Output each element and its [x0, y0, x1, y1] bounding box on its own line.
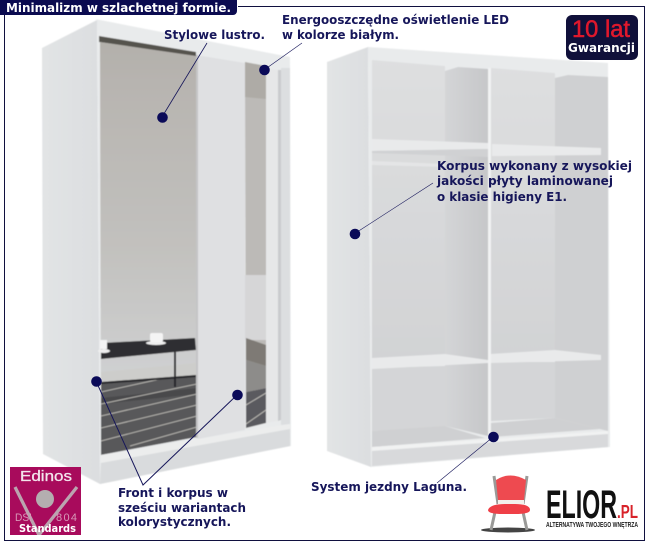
open wardrobe side panel — [327, 47, 371, 467]
lower shelves — [372, 350, 601, 369]
callout lines — [96, 43, 493, 485]
dark door rail — [99, 36, 196, 57]
Edinos standards badge: Standards — [19, 523, 76, 535]
label: running system: System jezdny Laguna. — [311, 480, 467, 494]
label: carcass — [436, 159, 632, 204]
left mirror — [98, 42, 197, 455]
label: colour variants — [118, 486, 246, 529]
inner side panels — [445, 67, 608, 436]
wardrobe side panel — [42, 20, 100, 484]
Edinos standards badge — [10, 467, 81, 535]
right mirror strip — [245, 62, 266, 428]
rug reflection — [101, 376, 197, 455]
open wardrobe front frame — [368, 47, 610, 467]
warranty badge: Gwarancji — [568, 41, 635, 55]
back walls — [372, 60, 555, 431]
warranty badge: 10 lat — [572, 16, 630, 43]
wardrobe plinth — [100, 424, 290, 484]
base board — [372, 434, 608, 466]
right door edge — [266, 68, 278, 423]
ELIOR.PL logo: .PL — [617, 502, 638, 522]
title: Minimalizm w szlachetnej formie. — [6, 0, 231, 15]
label: colour variants: sześciu wariantach — [118, 501, 246, 515]
wardrobe top and front frame — [95, 19, 291, 484]
centre divider — [488, 68, 491, 438]
left wardrobe with mirror doors — [42, 19, 291, 484]
label: LED lighting — [282, 13, 509, 42]
centre door — [196, 55, 245, 439]
label: colour variants: kolorystycznych. — [118, 515, 231, 529]
label: colour variants: Front i korpus w — [118, 486, 228, 500]
label: carcass: jakości płyty laminowanej — [436, 174, 613, 188]
bottom rail — [372, 431, 608, 451]
hanging rail — [372, 161, 445, 167]
coffee table — [101, 338, 196, 387]
label: LED lighting: w kolorze białym. — [282, 28, 399, 42]
Edinos standards badge: 804 — [56, 512, 77, 524]
label: LED lighting: Energooszczędne oświetlenie LED — [282, 13, 509, 27]
Edinos standards badge: Edinos — [20, 468, 72, 485]
mirror floor — [101, 363, 197, 384]
bottom boards — [372, 418, 600, 447]
upper shelves — [372, 139, 601, 157]
label: mirror: Stylowe lustro. — [164, 28, 265, 42]
label: carcass: o klasie higieny E1. — [437, 190, 567, 204]
label: carcass: Korpus wykonany z wysokiej — [437, 159, 632, 173]
warranty badge — [566, 15, 638, 60]
cups — [98, 333, 166, 353]
callout dots — [91, 65, 499, 442]
right wardrobe interior — [327, 47, 610, 467]
Edinos standards badge: DSI — [15, 512, 32, 524]
icon: red chair — [481, 476, 535, 532]
